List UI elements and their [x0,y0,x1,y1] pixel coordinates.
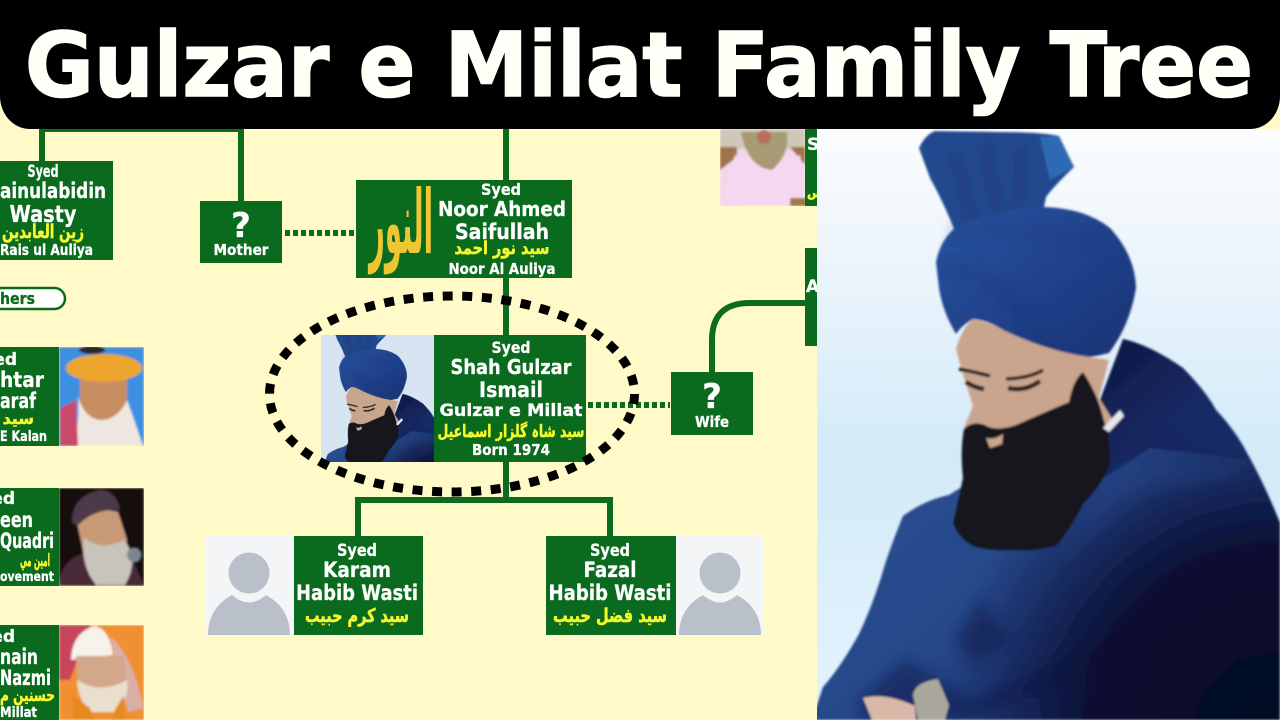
icon: avatar placeholder [676,536,764,635]
top-right cropped photo [720,129,806,206]
node: Syed Karam Habib Wasti: Syed [337,541,377,561]
node: Syed Shah Gulzar Ismail: Syed [492,338,530,357]
node: Syed Zainulabidin Wasty: زين العابدين [2,221,84,243]
tree connectors [42,125,805,536]
node: Syed Noor Ahmed Saifullah [356,171,572,278]
photo: Gulzar e Millat inset [321,335,434,462]
node: Wife: Wife [695,413,729,431]
watch [913,679,949,720]
shoulder highlight [1060,461,1250,560]
main turban [936,207,1136,358]
spouse links (dotted) [285,233,670,405]
node: right cropped box [805,248,820,346]
node: Syed Shah Gulzar Ismail [321,335,586,462]
node: Syed Fazal Habib Wasti: سید فضل حبیب [553,605,667,627]
node: Syed Ameen Quadri: امين مي [20,551,50,571]
node: Syed Akhtar Ashraf: E Kalan [0,429,47,445]
photo: Hasnain Nazmi [59,625,144,720]
knot of turban [919,131,1074,234]
node: Syed Shah Gulzar Ismail: Gulzar e Millat [440,401,582,421]
node: top-right cropped box [805,129,824,206]
node: Syed Fazal Habib Wasti: Fazal [584,558,636,582]
node: Syed Hasnain Nazmi: nain [0,645,38,669]
node: Syed Fazal Habib Wasti: Syed [590,541,630,561]
node: top-right cropped box: س [807,186,824,200]
node: Syed Noor Ahmed Saifullah: Noor Ahmed [438,197,566,221]
node: Syed Zainulabidin Wasty [0,161,113,260]
lower lip [986,434,1003,448]
node: Syed Shah Gulzar Ismail: Shah Gulzar [450,355,572,379]
node: Syed Zainulabidin Wasty: ainulabidin [0,179,106,203]
node: Syed Akhtar Ashraf [0,346,144,446]
pill label: brothers: hers [0,289,35,308]
node: Syed Noor Ahmed Saifullah: Noor Al Auliya [448,260,556,278]
figure: man in blue turban [800,131,1280,720]
background panel: family tree chart [0,0,817,720]
node: Syed Shah Gulzar Ismail: سید شاہ گلزار اسماعیل [438,421,584,442]
node: Syed Noor Ahmed Saifullah: سید نور احمد [454,238,550,259]
node: top-right cropped box: S [807,135,819,155]
node: Syed Karam Habib Wasti: Habib Wasti [296,581,418,605]
node: Mother: Mother [214,241,269,259]
node: Syed Ameen Quadri [0,488,144,586]
node: Syed Shah Gulzar Ismail: Ismail [479,378,543,402]
node: Mother [200,201,282,263]
node: Syed Karam Habib Wasti: سید کرم حبیب [305,605,409,627]
node: Wife [671,372,753,435]
pill label: brothers [0,288,65,309]
robe [800,330,1280,720]
node: Syed Hasnain Nazmi: Nazmi [0,666,51,690]
rear cloth [1090,335,1250,478]
node: Syed Hasnain Nazmi: حسنين م [0,686,55,706]
node: Syed Zainulabidin Wasty: Syed [28,162,58,182]
node: Syed Hasnain Nazmi [0,625,144,720]
turban fold [936,272,937,273]
node: Syed Akhtar Ashraf: htar [0,368,45,392]
node: Syed Akhtar Ashraf: araf [0,389,37,413]
eyebrows and closed eyes [959,369,1043,379]
node: Syed Fazal Habib Wasti: Habib Wasti [548,581,672,605]
hand [863,696,916,720]
node: Wife: ? [702,377,722,417]
node: right cropped box: A [806,277,820,297]
node: Syed Ameen Quadri: een [0,508,33,532]
node: Syed Noor Ahmed Saifullah: Syed [481,180,521,199]
photo: Ameen Quadri [59,488,144,586]
node: Syed Karam Habib Wasti [205,536,423,635]
beard [953,372,1110,550]
icon: avatar placeholder [205,536,294,635]
node: Syed Ameen Quadri: ovement [0,570,54,585]
photo: Akhtar Ashraf [59,346,144,446]
crossed arm shading [856,618,1121,720]
calligraphy: An-Noor emblem: النور [368,171,433,275]
node: Syed Akhtar Ashraf: سيد [2,409,34,428]
node: Syed Zainulabidin Wasty: Rais ul Auliya [0,241,93,259]
node: Syed Fazal Habib Wasti [546,536,764,635]
node: Syed Ameen Quadri: Quadri [0,529,54,553]
node: Syed Shah Gulzar Ismail: Born 1974 [472,441,550,459]
node: Mother: ? [231,206,251,246]
node: Syed Noor Ahmed Saifullah: Saifullah [455,220,549,244]
node: Syed Zainulabidin Wasty: Wasty [10,202,77,228]
dark lower-right shadow [800,330,1280,720]
face [956,319,1116,452]
node: Syed Karam Habib Wasti: Karam [323,558,391,582]
highlight: dotted ellipse [270,296,634,492]
photo panel: portrait of Gulzar e Millat [800,129,1280,720]
collar [1103,410,1124,432]
title banner [0,0,1280,129]
